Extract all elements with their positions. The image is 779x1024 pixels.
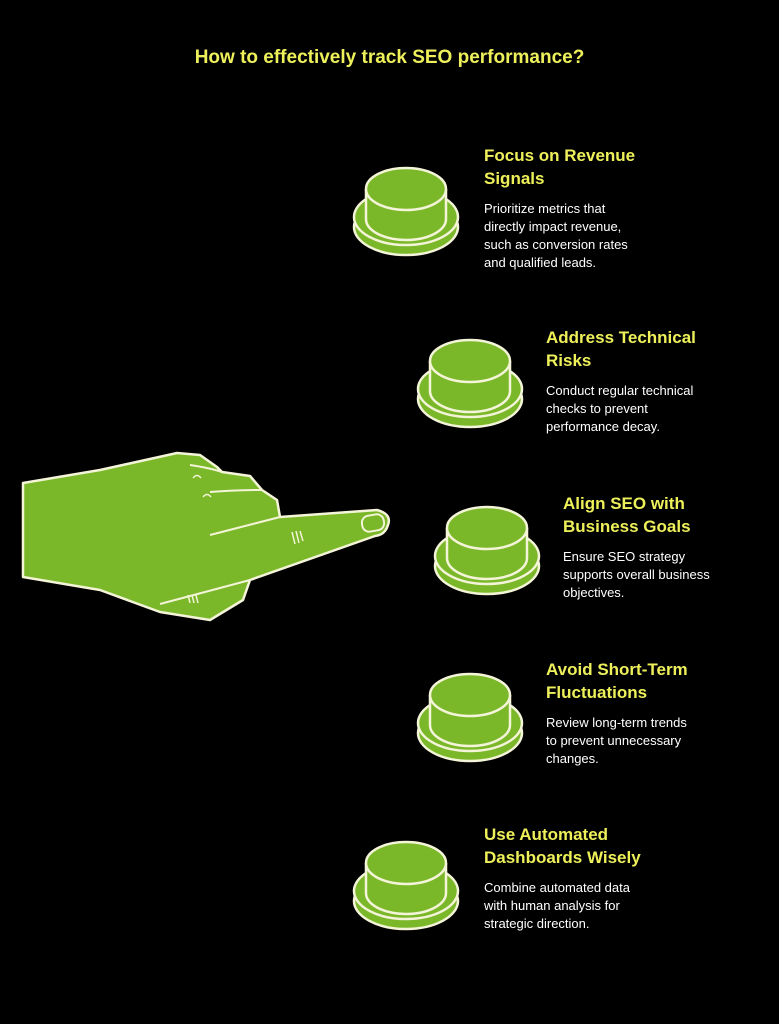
icon: pointing hand: [22, 452, 390, 622]
title: How to effectively track SEO performance?: [195, 47, 584, 68]
text: Prioritize metrics that: [484, 201, 605, 216]
text: and qualified leads.: [484, 255, 596, 270]
text 5: Use Automated: [484, 825, 608, 844]
text: performance decay.: [546, 419, 660, 434]
text: changes.: [546, 751, 599, 766]
text: Conduct regular technical: [546, 383, 693, 398]
button 2: [416, 338, 524, 428]
text: Ensure SEO strategy: [563, 549, 685, 564]
text: Combine automated data: [484, 880, 630, 895]
text: objectives.: [563, 585, 624, 600]
text 2: [546, 328, 696, 370]
text: directly impact revenue,: [484, 219, 621, 234]
text: with human analysis for: [484, 898, 620, 913]
text: to prevent unnecessary: [546, 733, 681, 748]
button 1: [352, 166, 460, 256]
text 1: Focus on Revenue: [484, 146, 635, 165]
text 1: [484, 146, 635, 188]
text 5: Dashboards Wisely: [484, 848, 641, 867]
text: strategic direction.: [484, 916, 590, 931]
text 2: Address Technical: [546, 328, 696, 347]
button 3: [434, 506, 540, 596]
text 3: [563, 494, 691, 536]
text 4: Avoid Short-Term: [546, 660, 688, 679]
text 3: Business Goals: [563, 517, 691, 536]
button 4: [416, 672, 524, 762]
text 1: Signals: [484, 169, 544, 188]
text: checks to prevent: [546, 401, 648, 416]
text 5: [484, 825, 641, 867]
text 4: [546, 660, 688, 702]
text 3: Align SEO with: [563, 494, 685, 513]
text 4: Fluctuations: [546, 683, 647, 702]
text: supports overall business: [563, 567, 710, 582]
button 5: [352, 840, 460, 930]
text: such as conversion rates: [484, 237, 628, 252]
text 2: Risks: [546, 351, 591, 370]
text: Review long-term trends: [546, 715, 687, 730]
